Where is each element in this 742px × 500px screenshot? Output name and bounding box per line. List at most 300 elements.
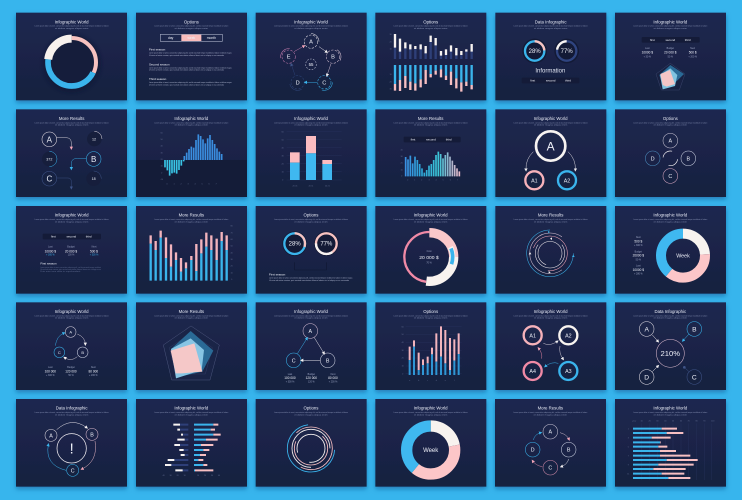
bar chart: 80: [231, 226, 234, 228]
subtitle: Lorem ipsum dolor sit amet, consectetur adipiscing elit, sed do eiusmod tempor incididunt ut labore: [274, 314, 348, 317]
subtitle: Lorem ipsum dolor sit amet, consectetur adipiscing elit, sed do eiusmod tempor incididunt ut labore: [394, 411, 468, 414]
triangle diagram: A: [309, 329, 313, 335]
subtitle: [514, 218, 588, 223]
bar chart: 20 11: [309, 186, 313, 188]
bar chart: 1: [414, 179, 415, 181]
subtitle: [35, 411, 109, 416]
alert cycle diagram: C: [71, 468, 75, 474]
connector arrows: [295, 262, 326, 270]
tabs: first: [411, 138, 416, 142]
cycle diagram: E: [287, 55, 291, 61]
bar chart: 60: [231, 239, 234, 241]
stats: [642, 47, 697, 58]
subtitle: et dolore magna aliqua enim: [534, 124, 568, 127]
stats: 20000 $: [633, 254, 644, 258]
subtitle: Lorem ipsum dolor sit amet, consectetur adipiscing elit, sed do eiusmod tempor incididunt ut labore: [154, 121, 228, 124]
ring cycle diagram: A2: [565, 333, 572, 339]
ring: 77 percent: 77%: [320, 242, 333, 248]
stats: [284, 373, 338, 384]
title: Options: [304, 406, 318, 411]
subtitle: Lorem ipsum dolor sit amet, consectetur adipiscing elit, sed do eiusmod tempor incididunt ut labore: [633, 314, 707, 317]
bar chart: 30: [161, 152, 164, 154]
text block: first season: [269, 273, 353, 282]
cycle diagram: C: [548, 466, 552, 472]
bar chart: 50: [402, 334, 405, 336]
tabs: day week month: month: [207, 36, 216, 40]
subtitle: et dolore magna aliqua enim: [414, 317, 448, 320]
text block: first season: [149, 48, 233, 57]
bar chart: 30: [390, 34, 393, 36]
hub diagram: [639, 322, 702, 384]
title: Options: [304, 213, 318, 218]
tabs: third: [565, 79, 571, 83]
subtitle: [514, 25, 588, 30]
subtitle: Lorem ipsum dolor sit amet, consectetur adipiscing elit, sed do eiusmod tempor incididunt ut labore: [154, 411, 228, 414]
heading: information: Information: [535, 68, 565, 74]
tabs: first: [530, 79, 535, 83]
title: Options: [663, 116, 678, 121]
text block: second season: Second season: [149, 62, 170, 66]
alert cycle diagram: [45, 422, 98, 476]
subtitle: et dolore magna aliqua enim: [414, 413, 448, 416]
butterfly bar chart: 40: [218, 475, 221, 477]
cycle diagram: B: [567, 448, 571, 454]
subtitle: [633, 25, 707, 30]
stats: + 300 %: [286, 382, 294, 384]
bar chart: 40: [231, 252, 234, 254]
bar chart: 10: [401, 169, 404, 171]
subtitle: [154, 314, 228, 320]
bar chart: 2: [180, 183, 182, 185]
bar chart: 10: [641, 420, 644, 422]
gauge value: Cost: [427, 250, 432, 253]
panel: alert cycle: [16, 399, 127, 487]
title: Options: [184, 19, 199, 24]
subtitle: [633, 314, 707, 320]
cycle diagram: [54, 327, 88, 360]
subtitle: et dolore magna aliqua enim: [534, 317, 568, 320]
subtitle: Lorem ipsum dolor sit amet, consectetur adipiscing elit, sed do eiusmod tempor incididunt ut labore: [35, 314, 109, 317]
radar chart: [656, 63, 685, 90]
title: Infographic World: [55, 213, 89, 218]
stats: 80 000: [328, 376, 338, 380]
subtitle: [514, 121, 588, 127]
panel: more results flow: [16, 109, 127, 197]
butterfly bar chart: 30: [170, 475, 173, 477]
alert cycle diagram: A: [49, 433, 53, 439]
gauge value: [419, 250, 439, 265]
hub diagram: C: [692, 374, 697, 381]
tabs: third: [685, 38, 691, 42]
title: Options: [423, 19, 438, 24]
bar chart: 40: [402, 342, 405, 344]
subtitle: et dolore magna aliqua enim: [55, 27, 89, 30]
text block: third season: Lorem ipsum dolor sit amet, consectetur adipiscing elit, sed do eiusmod tempor incididunt ut labore et dolore magna: [149, 81, 233, 84]
text block: first season: Duis aute irure dolor in reprehenderit: [40, 270, 81, 273]
cycle diagram: C: [58, 350, 61, 355]
stats: Budget: [635, 250, 642, 253]
stats: + 300 %: [46, 375, 55, 377]
text block: first season: Ut enim ad minim veniam, quis nostrud exercitation ullamco laboris nisi ut aliquip ex ea commodo: [149, 54, 224, 57]
title: More Results: [538, 213, 563, 218]
stats: 50 %: [68, 375, 74, 377]
title: Data Infographic: [56, 406, 88, 411]
panel: 210 percent hub: [615, 302, 726, 390]
bar chart: 3: [428, 179, 430, 181]
subtitle: [35, 121, 109, 127]
stats: + 300 %: [46, 255, 55, 257]
panel: four step cycle: [495, 399, 606, 487]
bar chart: 50: [161, 139, 164, 141]
bar chart: 100: [711, 420, 715, 422]
subtitle: et dolore magna aliqua enim: [534, 220, 568, 223]
panel: two rings with arrows: [256, 206, 367, 294]
stats: Next: [636, 236, 641, 239]
cycle diagram: D: [296, 80, 300, 86]
subtitle: Lorem ipsum dolor sit amet, consectetur adipiscing elit, sed do eiusmod tempor incididunt ut labore: [154, 218, 228, 221]
stats: 500 $: [90, 249, 98, 253]
bar chart: e: [445, 380, 447, 382]
subtitle: Lorem ipsum dolor sit amet, consectetur adipiscing elit, sed do eiusmod tempor incididunt ut labore: [154, 25, 228, 28]
subtitle: [394, 411, 468, 416]
bar chart: 40: [664, 420, 667, 422]
stats: + 300 %: [634, 245, 643, 247]
tabs: second: [666, 38, 675, 42]
panel: concentric rings: [256, 399, 367, 487]
bar chart: 40: [401, 149, 404, 151]
subtitle: [274, 218, 348, 223]
text block: first season: Lorem ipsum dolor sit amet, consectetur adipiscing elit, sed do eiusmod tempor incididunt: [40, 266, 101, 269]
bar chart: 20: [231, 266, 234, 268]
panel: four circles around arcs: [615, 109, 726, 197]
bar chart: 0: [161, 172, 163, 174]
title: Infographic World: [294, 19, 329, 24]
stats: 20 000 $: [664, 51, 677, 55]
subtitle: et dolore magna aliqua enim: [294, 220, 328, 223]
subtitle: Lorem ipsum dolor sit amet, consectetur adipiscing elit, sed do eiusmod tempor incididunt ut labore: [274, 218, 348, 221]
stats: 10000 $: [633, 268, 644, 272]
flow diagram: 372: [46, 157, 52, 161]
text block: third season: Ut enim ad minim veniam, quis nostrud exercitation ullamco laboris nisi ut aliquip ex ea commodo: [149, 83, 224, 86]
stats: 10000 $: [45, 249, 56, 253]
subtitle: Lorem ipsum dolor sit amet, consectetur adipiscing elit, sed do eiusmod tempor incididunt ut labore: [35, 218, 109, 221]
subtitle: [274, 25, 348, 30]
tabs: [404, 137, 461, 142]
bar chart: [390, 34, 472, 92]
cycle diagram: [525, 424, 576, 475]
stats: + 200 %: [329, 382, 337, 384]
subtitle: Lorem ipsum dolor sit amet, consectetur adipiscing elit, sed do eiusmod tempor incididunt ut labore: [633, 411, 707, 414]
subtitle: et dolore magna aliqua enim: [55, 413, 89, 416]
circle diagram: D: [651, 156, 655, 162]
subtitle: et dolore magna aliqua enim: [534, 27, 568, 30]
bar chart: [282, 131, 342, 188]
stats: Last: [48, 246, 53, 249]
subtitle: [394, 314, 468, 320]
bar chart: [136, 132, 247, 197]
tabs: first: [51, 235, 56, 239]
bar chart: 50: [282, 139, 285, 141]
subtitle: Lorem ipsum dolor sit amet, consectetur adipiscing elit, sed do eiusmod tempor incididunt ut labore: [514, 121, 588, 124]
cycle diagram: A: [549, 430, 553, 436]
bar chart: 60: [680, 420, 683, 422]
subtitle: [633, 411, 707, 416]
cycle diagram: B: [331, 55, 335, 61]
bar chart: 70: [231, 232, 234, 234]
subtitle: Lorem ipsum dolor sit amet, consectetur adipiscing elit, sed do eiusmod tempor incididunt ut labore: [35, 25, 109, 28]
ring chart: [42, 34, 101, 93]
subtitle: [154, 25, 228, 30]
tabs: day week month: week: [187, 36, 196, 40]
title: More Results: [418, 116, 443, 121]
tabs: first: [650, 38, 655, 42]
stats: 80 000: [89, 369, 98, 373]
subtitle: et dolore magna aliqua enim: [55, 124, 89, 127]
subtitle: et dolore magna aliqua enim: [294, 27, 328, 30]
subtitle: Lorem ipsum dolor sit amet, consectetur adipiscing elit, sed do eiusmod tempor incididunt ut labore: [514, 218, 588, 221]
hub diagram: 210%: [661, 349, 680, 358]
stats: 20 000 $: [65, 249, 77, 253]
subtitle: Lorem ipsum dolor sit amet, consectetur adipiscing elit, sed do eiusmod tempor incididunt ut labore: [633, 218, 707, 221]
butterfly bar chart: 30: [211, 475, 214, 477]
tabs: third: [446, 138, 452, 142]
bar chart: 1: [628, 428, 629, 430]
bar chart: 90: [703, 420, 706, 422]
bar chart: 50: [231, 246, 234, 248]
panel: radar with stats: [615, 13, 726, 100]
panel: triangle cycle: [256, 302, 367, 390]
bar chart: 4: [435, 179, 437, 181]
panel: tall stacked bars: [136, 206, 247, 294]
cycle diagram: 55: [309, 62, 314, 67]
title: More Results: [538, 406, 563, 411]
bar chart: 30: [656, 420, 659, 422]
bar chart: d: [436, 380, 437, 382]
subtitle: et dolore magna aliqua enim: [414, 124, 448, 127]
text block: first season: Lorem ipsum dolor sit amet, consectetur adipiscing elit, sed do eiusmod tempor incididunt ut labore et dolore magna: [149, 52, 233, 55]
text block: first season: [40, 261, 102, 273]
bar chart: 5: [442, 179, 444, 181]
triangle diagram: [286, 324, 335, 368]
stats: 10000 $: [642, 51, 653, 55]
subtitle: [274, 314, 348, 320]
subtitle: [274, 411, 348, 416]
tabs: [642, 37, 700, 43]
bar chart: 6: [450, 179, 452, 181]
bar chart: 10: [390, 49, 393, 51]
subtitle: et dolore magna aliqua enim: [175, 124, 209, 127]
title: Infographic World: [55, 309, 89, 314]
stats: 100 000: [284, 376, 296, 380]
stats: Last: [48, 366, 53, 369]
bar chart: 20 01: [293, 186, 297, 188]
panel: large week donut: [375, 399, 486, 487]
tabs: [43, 234, 101, 239]
bar chart: 40: [282, 147, 285, 149]
text block: first season: First season: [40, 261, 57, 265]
panel: mirrored stacked bars: [375, 13, 486, 100]
ring: 77 percent: 77%: [561, 49, 573, 55]
panel: tabbed gradient bars: [375, 109, 486, 197]
bar chart: b: [418, 380, 420, 382]
title: Infographic World: [534, 116, 568, 121]
radar chart: [163, 326, 219, 380]
subtitle: [154, 218, 228, 223]
subtitle: Lorem ipsum dolor sit amet, consectetur adipiscing elit, sed do eiusmod tempor incididunt ut labore: [633, 25, 707, 28]
cycle diagram: [279, 34, 344, 93]
bar chart: 40: [161, 146, 164, 148]
text block: first season: First season: [269, 273, 286, 277]
cycle diagram: A: [309, 40, 313, 46]
ring: 28 percent: 28%: [529, 49, 541, 55]
title: Infographic World: [653, 213, 688, 218]
ring cycle diagram: A1: [529, 333, 536, 339]
flow diagram: A: [47, 135, 53, 144]
panel: five step cycle: [256, 13, 367, 100]
alert cycle diagram: B: [90, 432, 94, 438]
stats: 500 $: [634, 239, 643, 243]
subtitle: et dolore magna aliqua enim: [654, 220, 688, 223]
bar chart: 20: [401, 163, 404, 165]
stats: Budget: [67, 246, 75, 249]
bar chart: 10: [390, 74, 393, 76]
bar chart: 0: [166, 183, 168, 185]
stats: Next: [92, 246, 97, 249]
text block: third season: [149, 77, 233, 86]
bar chart: 9: [628, 464, 630, 466]
panel: stacked columns with grid: [375, 302, 486, 390]
subtitle: Lorem ipsum dolor sit amet, consectetur adipiscing elit, sed do eiusmod tempor incididunt ut labore: [513, 411, 587, 414]
stats: Last: [288, 373, 293, 376]
subtitle: et dolore magna aliqua enim: [175, 27, 209, 30]
hub diagram: B: [692, 326, 697, 333]
panel: four rings cycle: [495, 302, 606, 390]
butterfly bar chart: 10: [184, 475, 187, 477]
subtitle: et dolore magna aliqua enim: [414, 220, 448, 223]
concentric arcs: [527, 230, 575, 277]
stats: [45, 366, 98, 377]
title: Infographic World: [414, 406, 448, 411]
tabs: day week month: [160, 34, 222, 41]
bar chart: 10: [161, 166, 164, 168]
subtitle: Lorem ipsum dolor sit amet, consectetur adipiscing elit, sed do eiusmod tempor incididunt ut labore: [514, 314, 588, 317]
title: Infographic World: [294, 116, 329, 121]
stats: 100 000: [45, 369, 56, 373]
subtitle: et dolore magna aliqua enim: [654, 27, 688, 30]
flow diagram: [42, 131, 102, 188]
stats: [45, 246, 98, 257]
panel: A to A1 and A2: [495, 109, 606, 197]
subtitle: Lorem ipsum dolor sit amet, consectetur adipiscing elit, sed do eiusmod tempor incididunt ut labore: [274, 411, 348, 414]
panel: data infographic with two rings: [495, 13, 606, 100]
bar chart: 10: [231, 272, 234, 274]
text block: second season: [149, 62, 233, 72]
gauge ring: [404, 232, 454, 282]
bar chart: year: [632, 419, 637, 422]
triangle diagram: B: [326, 358, 330, 364]
flow diagram: 12: [92, 137, 96, 141]
text block: third season: Third season: [149, 77, 167, 81]
tabs: second: [546, 79, 556, 83]
tabs: second: [67, 235, 76, 239]
bar chart: 20: [282, 163, 285, 165]
cycle diagram: D: [531, 448, 535, 454]
bar chart: 5: [628, 446, 630, 448]
alert cycle diagram: !: [70, 442, 74, 458]
panel: concentric arcs with arrows: [495, 206, 606, 294]
cycle diagram: A: [69, 330, 72, 335]
stats: + 280 %: [634, 274, 643, 276]
subtitle: [35, 218, 109, 223]
concentric rings: [287, 425, 335, 472]
bar chart: 0: [407, 179, 409, 181]
stats: + 30 %: [644, 56, 651, 58]
panel: three step cycle with stats: [16, 302, 127, 390]
bar chart: 60: [282, 131, 285, 133]
butterfly bar chart: 10: [197, 475, 200, 477]
bar chart: 7: [457, 179, 458, 181]
ring cycle diagram: A4: [529, 369, 536, 375]
subtitle: Lorem ipsum dolor sit amet, consectetur adipiscing elit, sed do eiusmod tempor incididunt ut labore: [274, 25, 348, 28]
title: Infographic World: [534, 309, 568, 314]
subtitle: Lorem ipsum dolor sit amet, consectetur adipiscing elit, sed do eiusmod tempor incididunt ut labore: [514, 25, 588, 28]
subtitle: [394, 121, 468, 127]
cycle diagram: C: [322, 80, 326, 86]
subtitle: et dolore magna aliqua enim: [294, 413, 328, 416]
tabs: third: [86, 235, 92, 239]
subtitle: [633, 218, 707, 223]
subtitle: [514, 314, 588, 320]
ring: 28 percent: 28%: [289, 242, 301, 248]
stats: Budget: [667, 47, 674, 50]
hub diagram: D: [644, 374, 649, 381]
triangle diagram: C: [292, 358, 296, 364]
ring cycle diagram: A3: [565, 369, 572, 375]
bar chart: 2: [421, 179, 422, 181]
subtitle: et dolore magna aliqua enim: [55, 220, 89, 223]
title: Infographic World: [414, 213, 448, 218]
subtitle: et dolore magna aliqua enim: [294, 317, 328, 320]
circle diagram: C: [668, 174, 672, 180]
subtitle: Lorem ipsum dolor sit amet, consectetur adipiscing elit, sed do eiusmod tempor incididunt ut labore: [394, 314, 468, 317]
subtitle: Lorem ipsum dolor sit amet, consectetur adipiscing elit, sed do eiusmod tempor incididunt ut labore: [154, 314, 228, 317]
title: Options: [423, 309, 438, 314]
cycle diagram: B: [81, 350, 84, 355]
subtitle: et dolore magna aliqua enim: [294, 124, 328, 127]
bar chart: [401, 149, 459, 181]
bar chart: 10: [282, 171, 285, 173]
butterfly bar chart: 20: [177, 475, 180, 477]
stats: Budget: [67, 366, 75, 369]
bar chart: 20: [390, 41, 393, 43]
stats: Last: [636, 265, 641, 268]
bar chart: f: [454, 380, 455, 382]
bar chart: 30: [390, 89, 393, 91]
butterfly bar chart: 20: [204, 475, 207, 477]
bar chart: 10: [402, 366, 405, 368]
hierarchy diagram: [525, 131, 576, 189]
subtitle: Lorem ipsum dolor sit amet, consectetur adipiscing elit, sed do eiusmod tempor incididunt ut labore: [35, 411, 109, 414]
subtitle: et dolore magna aliqua enim: [534, 413, 568, 416]
bar chart: 0: [402, 373, 404, 375]
bar chart: 6: [208, 183, 210, 185]
bar chart: 20 21: [325, 186, 330, 188]
text block: first season: First season: [149, 48, 166, 52]
bar chart: 20: [161, 159, 164, 161]
title: More Results: [59, 116, 84, 121]
flow diagram: B: [91, 155, 96, 164]
flow diagram: C: [46, 175, 52, 184]
